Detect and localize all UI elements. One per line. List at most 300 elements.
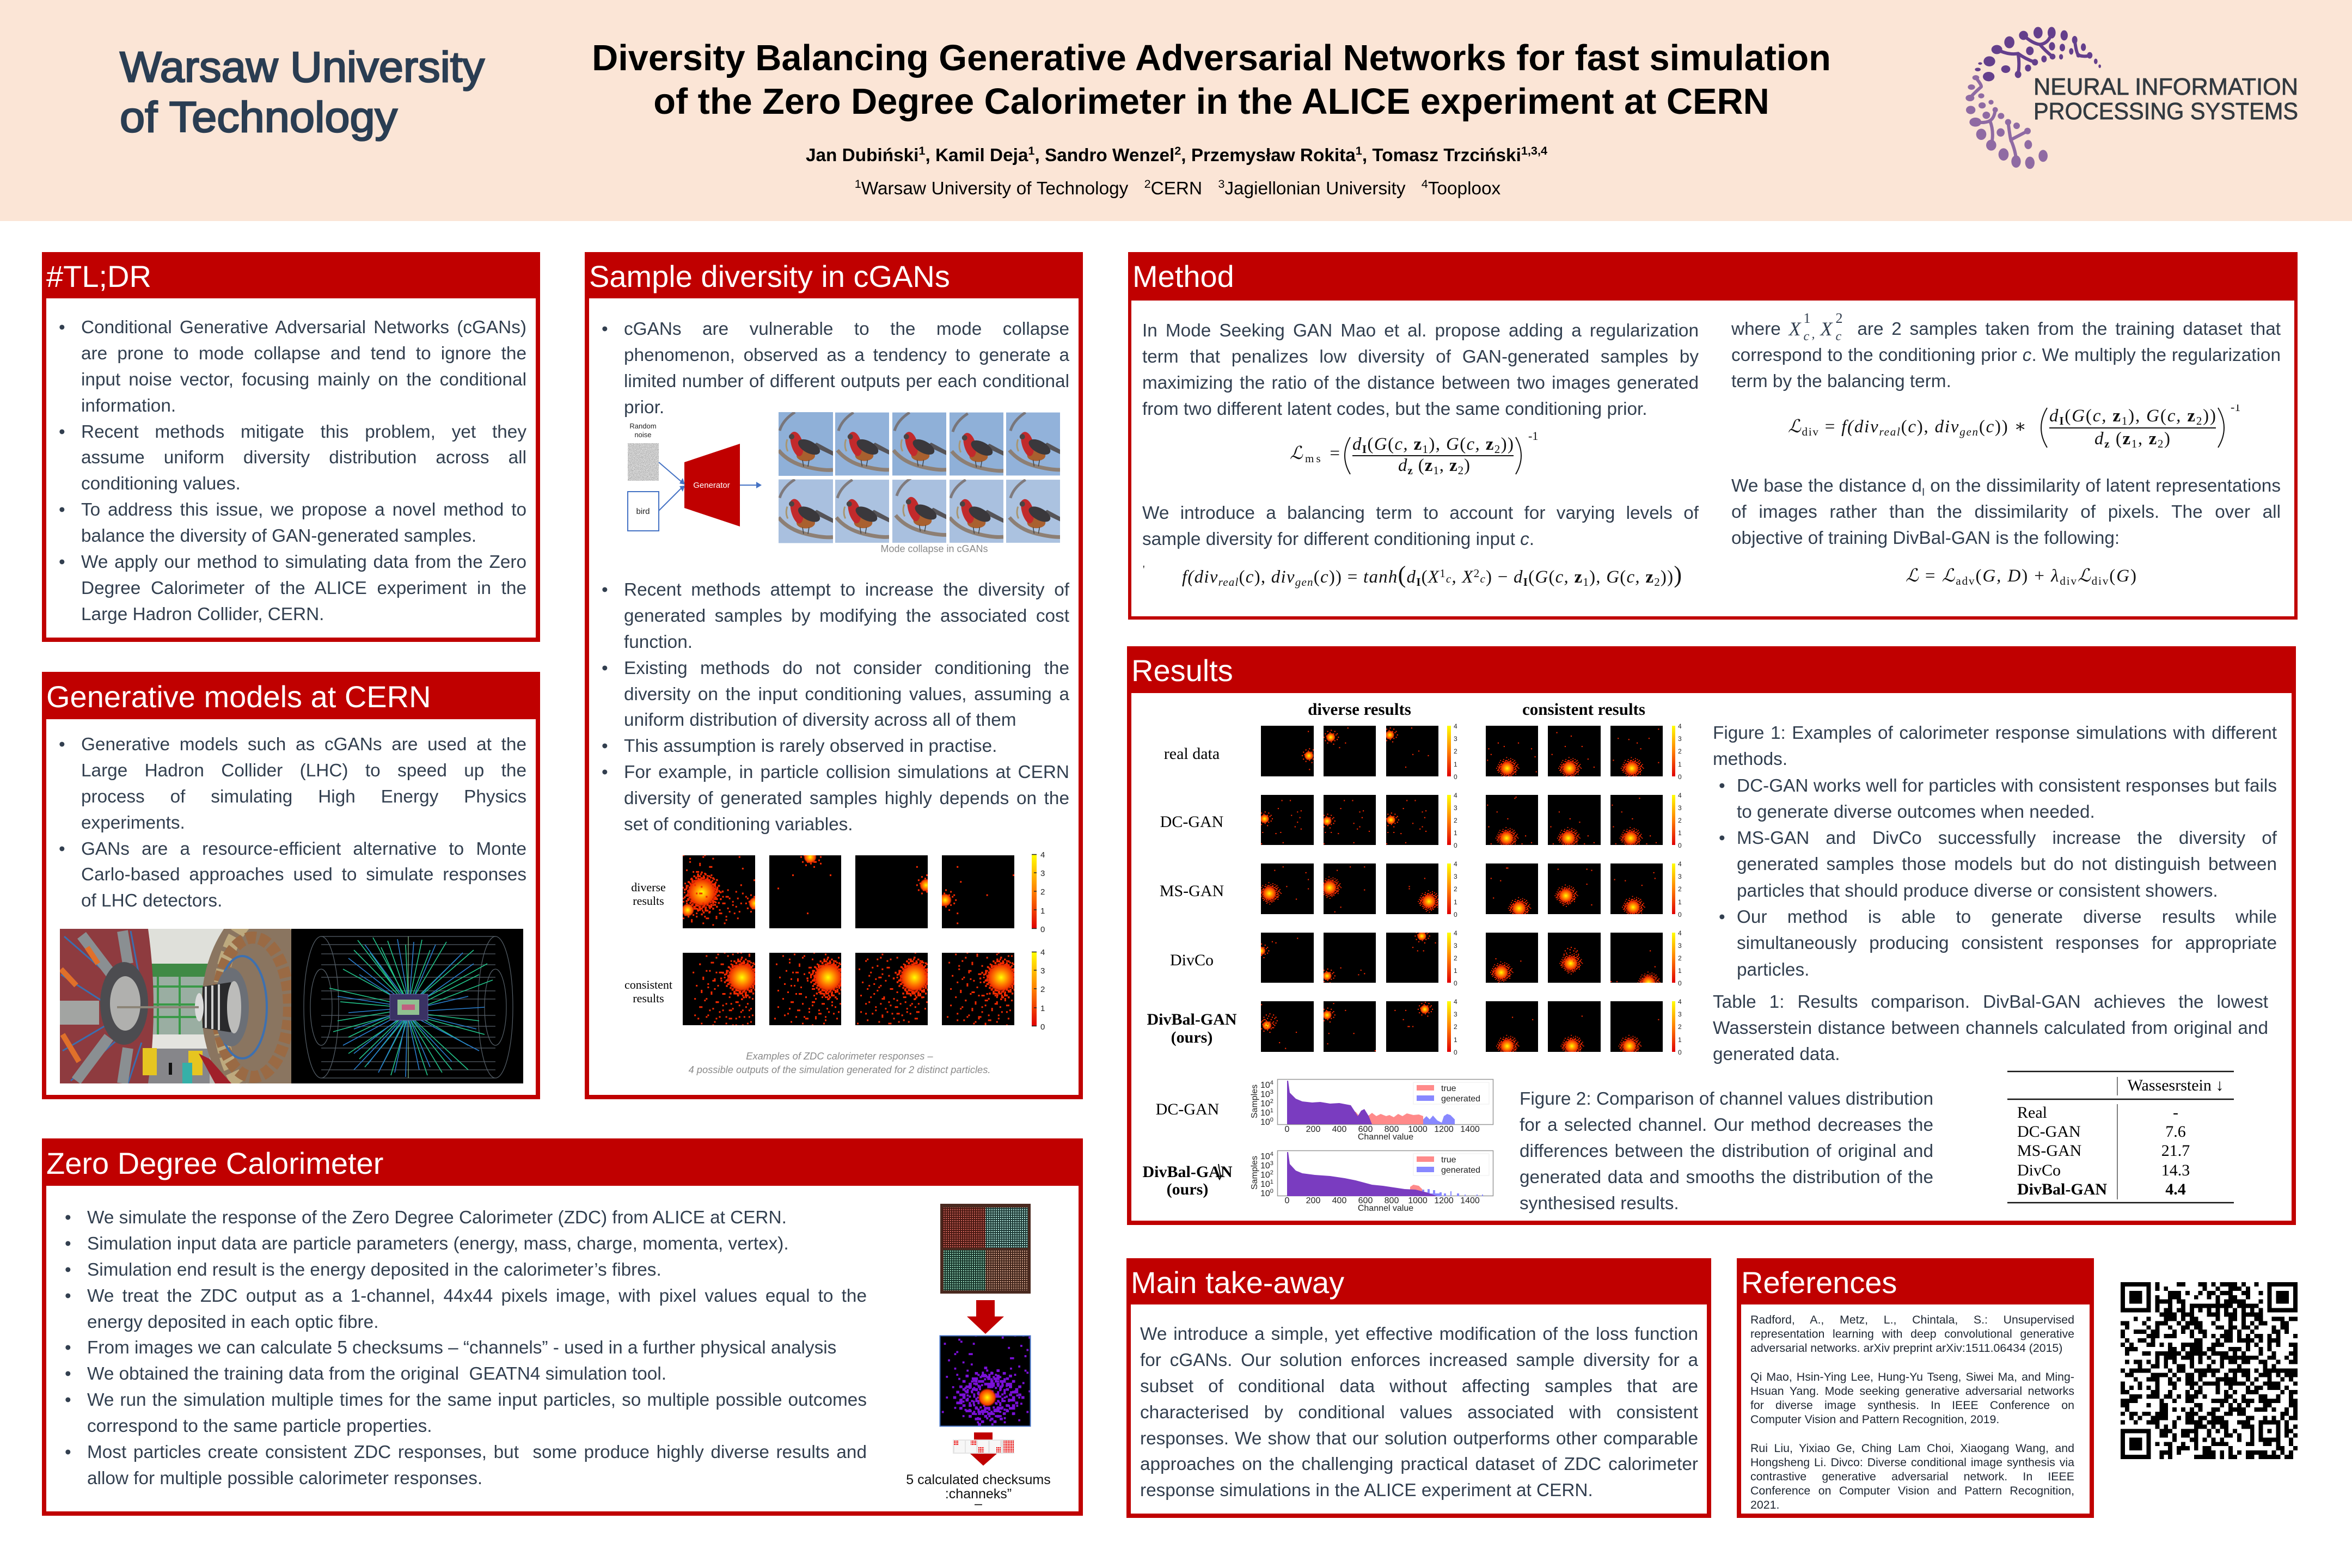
- text block: mode seeking GAN: In Mode Seeking GAN Mao et al. propose adding a regularization: [1142, 321, 1699, 341]
- text block: samples and conditioning prior: c: [1836, 329, 1841, 344]
- colorbars: 1: [1454, 761, 1457, 768]
- equation: mode seeking loss: ),: [1429, 434, 1445, 454]
- text block: ZDC bullets: We simulate the response of the Zero Degree Calorimeter (ZDC) from ALICE at CERN.: [87, 1208, 787, 1228]
- text block: samples and conditioning prior: correspond to the conditioning prior c. We multiply the regularization: [1731, 345, 2281, 365]
- histogram: DivBal-GAN: 800: [1385, 1196, 1399, 1205]
- histogram: DC-GAN: 1400: [1460, 1125, 1480, 1134]
- equation: mode seeking loss: 2: [1458, 464, 1463, 477]
- colorbars: 2: [1454, 885, 1457, 893]
- equation: mode seeking loss: ms: [1305, 452, 1321, 465]
- histogram: DivBal-GAN: 3: [1270, 1160, 1273, 1167]
- colorbars: 2: [1678, 1023, 1682, 1031]
- figure 2: channel value histograms: DC-GAN: [1156, 1100, 1219, 1118]
- text block: diversity conditioning: Recent methods attempt to increase the diversity of: [624, 580, 1069, 600]
- table: Wasserstein comparison: 7.6: [2165, 1123, 2186, 1141]
- figure: ZDC calorimeter response examples: 0: [1040, 1022, 1045, 1032]
- text block: table 1 caption: [1713, 989, 2268, 1068]
- histogram: DivBal-GAN: 1000: [1408, 1196, 1428, 1205]
- histogram: DC-GAN: Samples: [1250, 1085, 1259, 1118]
- equation: diversity loss: (: [2065, 406, 2071, 426]
- equation: mode seeking loss: ,: [1440, 456, 1449, 475]
- histogram: DC-GAN: Channel value: [1358, 1132, 1413, 1142]
- equation: balancing function: ): [1674, 561, 1682, 588]
- equation: diversity loss: ),: [2128, 406, 2145, 426]
- histogram: DivBal-GAN: Samples: [1250, 1156, 1259, 1190]
- table: Wasserstein comparison: Wassesrstein ↓: [2128, 1076, 2224, 1094]
- colorbars: 4: [1454, 722, 1457, 730]
- text block: ZDC bullets: We treat the ZDC output as a 1-channel, 44x44 pixels image, with pixel values equal to the: [87, 1286, 867, 1306]
- text block: mode seeking GAN: from two different latent codes, but the same conditioning prior.: [1142, 399, 1647, 419]
- histogram: DivBal-GAN: 1400: [1460, 1196, 1480, 1205]
- text block: samples and conditioning prior: X: [1789, 318, 1801, 340]
- text block: samples and conditioning prior: where are 2 samples taken from the training dataset that: [1731, 319, 2281, 339]
- logo: Neural Information Processing Systems: [1965, 27, 2298, 169]
- histogram: DivBal-GAN: 0: [1270, 1188, 1273, 1195]
- text block: TL;DR bullets: [59, 317, 526, 624]
- text block: TL;DR bullets: Large Hadron Collider, CERN.: [81, 604, 324, 624]
- equation: total objective: div: [2092, 574, 2109, 587]
- equation: balancing function: I: [1416, 575, 1420, 589]
- histogram: DivBal-GAN: 200: [1306, 1196, 1320, 1205]
- equation: diversity loss: d: [2049, 406, 2058, 426]
- equation: diversity loss: div: [1802, 425, 1818, 438]
- panel: Results: [1127, 646, 2296, 1225]
- equation: mode seeking loss: (: [1413, 456, 1424, 475]
- histogram: DC-GAN: 10: [1260, 1090, 1270, 1099]
- equation: total objective: G, D) + λ: [1982, 566, 2059, 586]
- histogram: DC-GAN: generated: [1441, 1094, 1480, 1104]
- colorbars: 3: [1678, 735, 1682, 743]
- histogram: DC-GAN: 4: [1270, 1080, 1273, 1086]
- text block: TL;DR bullets: conditioning values.: [81, 474, 241, 494]
- row: MS-GAN: [1258, 863, 1663, 919]
- authors: Jan Dubiński1, Kamil Deja1, Sandro Wenzel2, Przemysław Rokita1, Tomasz Trzciński1,3,4: [806, 144, 1547, 166]
- text block: generative models bullets: Generative models such as cGANs are used at the: [81, 734, 526, 755]
- text block: generative models bullets: [59, 734, 526, 911]
- text block: generative models bullets: GANs are a resource-efficient alternative to Monte: [81, 839, 526, 859]
- heading: Zero Degree Calorimeter: [42, 1138, 1083, 1186]
- row: DC-GAN: [1257, 795, 1663, 849]
- colorbars: 2: [1678, 885, 1682, 893]
- colorbars: 3: [1454, 804, 1457, 812]
- figure: ZDC calorimeter response examples: 2: [1040, 887, 1045, 897]
- colorbars: 1: [1454, 967, 1457, 975]
- colorbars: 0: [1678, 979, 1682, 987]
- text block: table 1 caption: generated data.: [1713, 1044, 1840, 1064]
- colorbars: 3: [1454, 873, 1457, 880]
- colorbars: 4: [1454, 792, 1457, 799]
- equation: mode seeking loss: =: [1323, 444, 1340, 463]
- figure 1: heatmap grid: (ours): [1171, 1028, 1212, 1046]
- text block: figure 1 discussion: Figure 1: Examples of calorimeter response simulations with different: [1713, 723, 2277, 743]
- equation: balancing function: ),: [1589, 567, 1606, 587]
- text block: balancing term: sample diversity for different conditioning input c.: [1142, 529, 1534, 549]
- text block: TL;DR bullets: Recent methods mitigate this problem, yet they: [81, 422, 526, 442]
- figure 1: heatmap grid: [1147, 700, 1682, 1056]
- colorbars: 0: [1454, 773, 1457, 781]
- text block: figure 1 discussion: •: [1719, 776, 1725, 796]
- equation: diversity loss: 1: [2122, 414, 2127, 427]
- diagram: detector to image to channels: :channeks”: [945, 1486, 1012, 1502]
- equation: mode seeking loss: (: [1367, 434, 1373, 454]
- histogram: DC-GAN: 600: [1358, 1125, 1373, 1134]
- histogram: DC-GAN: 0: [1270, 1117, 1273, 1123]
- colorbars: 1: [1454, 829, 1457, 837]
- title: Diversity Balancing Generative Adversarial Networks for fast simulation: [592, 38, 1831, 78]
- equation: balancing function: (: [1422, 567, 1428, 587]
- text block: distance on latent representations: We base the distance dI on the dissimilarity of latent representations: [1731, 476, 2281, 499]
- colorbars: 0: [1678, 911, 1682, 918]
- text block: TL;DR bullets: balance the diversity of GAN-generated samples.: [81, 526, 476, 546]
- text block: figure 1 discussion: particles.: [1737, 960, 1809, 980]
- logo: Warsaw University of Technology: [119, 42, 486, 142]
- text block: balancing term: We introduce a balancing term to account for varying levels of: [1142, 503, 1699, 523]
- equation: balancing function: G(c, z: [1535, 567, 1582, 587]
- figure: ZDC calorimeter response examples: 1: [1040, 1004, 1045, 1013]
- colorbars: 1: [1454, 898, 1457, 906]
- text block: samples and conditioning prior: 2: [1836, 310, 1843, 326]
- colorbars: 2: [1678, 817, 1682, 824]
- colorbars: 3: [1678, 804, 1682, 812]
- equation: mode seeking loss: d: [1398, 456, 1407, 475]
- equation: diversity loss: z: [2104, 437, 2109, 450]
- text block: references: 2021.: [1750, 1498, 1779, 1511]
- histogram: DivBal-GAN: 1: [1270, 1179, 1273, 1185]
- text block: references: Hongsheng Li. Divco: Diverse conditional image synthesis via: [1750, 1456, 2074, 1469]
- text block: references: Conference on Computer Vision and Pattern Recognition,: [1750, 1484, 2074, 1497]
- text block: TL;DR bullets: assume uniform diversity distribution across all: [81, 448, 526, 468]
- heading: Generative models at CERN: [42, 672, 540, 719]
- equation: balancing function: 2: [1474, 567, 1479, 580]
- text block: diversity conditioning: set of conditioning variables.: [624, 814, 853, 835]
- heading: TL;DR: #TL;DR: [46, 259, 151, 293]
- icon: neural dots mark: [1965, 27, 2101, 169]
- text block: take-away: responses. We show that our solution outperforms other comparable: [1140, 1429, 1698, 1449]
- histogram: DC-GAN: 10: [1260, 1118, 1270, 1127]
- colorbars: 4: [1454, 998, 1457, 1006]
- row: DivBal-GAN: [1260, 1001, 1663, 1057]
- text block: diversity conditioning: diversity on the input conditioning values, assuming a: [624, 684, 1069, 705]
- text block: ZDC bullets: Simulation end result is the energy deposited in the calorimeter’s fibres.: [87, 1260, 661, 1280]
- figure 1: heatmap grid: DivCo: [1170, 951, 1214, 969]
- equation: mode seeking loss: 1: [1433, 464, 1439, 477]
- colorbars: 1: [1678, 898, 1682, 906]
- colorbars: 4: [1678, 998, 1682, 1006]
- text block: TL;DR bullets: Degree Calorimeter of the ALICE experiment in the: [81, 578, 526, 598]
- text block: references: adversarial networks. arXiv preprint arXiv:1511.06434 (2015): [1750, 1342, 2062, 1355]
- figure: ZDC calorimeter response examples: results: [633, 991, 664, 1005]
- equation: diversity loss: I: [2059, 414, 2064, 427]
- heading: References: References: [1741, 1265, 1897, 1300]
- text block: TL;DR bullets: We apply our method to simulating data from the Zero: [81, 552, 526, 572]
- text block: TL;DR bullets: information.: [81, 396, 176, 416]
- text block: references: Qi Mao, Hsin-Ying Lee, Hung-Yu Tseng, Siwei Ma, and Ming-: [1750, 1370, 2074, 1383]
- equation: balancing function: [1143, 561, 1682, 589]
- equation: total objective: (: [1975, 566, 1981, 586]
- equation: diversity loss: 2: [2196, 414, 2202, 427]
- heading: TL;DR: [42, 252, 540, 298]
- equation: diversity loss: [1788, 400, 2240, 450]
- equation: balancing function: 2: [1654, 575, 1660, 589]
- equation: mode seeking loss: )): [1501, 434, 1514, 454]
- equation: balancing function: real: [1218, 575, 1238, 589]
- figure 1: heatmap grid: consistent results: [1522, 700, 1645, 719]
- equation: balancing function: c: [1480, 572, 1486, 585]
- text block: figure 2 caption: generated data and smooths the distribution of the: [1520, 1167, 1933, 1187]
- text block: ZDC bullets: Most particles create consistent ZDC responses, but some produce highly diverse results and: [87, 1442, 867, 1462]
- heading: Main take-away: Main take-away: [1131, 1265, 1344, 1300]
- equation: diversity loss: real: [1879, 425, 1900, 438]
- colorbars: 2: [1678, 748, 1682, 755]
- text block: figure 1 discussion: simultaneously producing consistent responses for appropriate: [1737, 933, 2277, 953]
- text block: mode collapse: phenomenon, observed as a tendency to generate a: [624, 345, 1069, 365]
- image: CMS detector photograph: [60, 929, 291, 1083]
- text block: generative models bullets: Large Hadron Collider (LHC) to speed up the: [81, 761, 526, 781]
- text block: diversity conditioning: Existing methods do not consider conditioning the: [624, 658, 1069, 678]
- equation: mode seeking loss: I: [1362, 443, 1367, 456]
- table: Wasserstein comparison: Real: [2017, 1104, 2047, 1122]
- colorbars: 0: [1454, 1049, 1457, 1056]
- equation: diversity loss: (: [1979, 417, 1985, 437]
- text block: figure 1 discussion: •: [1719, 907, 1725, 927]
- colorbars: 3: [1678, 1010, 1682, 1018]
- text block: take-away: We introduce a simple, yet effective modification of the loss function: [1140, 1324, 1698, 1344]
- text block: figure 2 caption: Figure 2: Comparison of channel values distribution: [1520, 1089, 1933, 1109]
- text block: samples and conditioning prior: ,: [1812, 327, 1815, 341]
- histogram: DC-GAN: 800: [1385, 1125, 1399, 1134]
- text block: references: Rui Liu, Yixiao Ge, Ching Lam Choi, Xiaogang Wang, and: [1750, 1442, 2074, 1455]
- figure 2: channel value histograms: (ours): [1167, 1180, 1208, 1198]
- text block: take-away: for cGANs. Our solution enforces increased sample diversity for a: [1140, 1350, 1698, 1370]
- colorbars: 0: [1454, 979, 1457, 987]
- colorbars: 4: [1678, 860, 1682, 868]
- equation: mode seeking loss: d: [1352, 434, 1361, 454]
- histogram: DC-GAN: 10: [1260, 1108, 1270, 1118]
- figure 1: heatmap grid: MS-GAN: [1160, 882, 1224, 900]
- histogram: DivBal-GAN: 10: [1260, 1180, 1270, 1189]
- histogram: DC-GAN: 200: [1306, 1125, 1320, 1134]
- figure 1: heatmap grid: real data: [1164, 745, 1220, 763]
- panel: Main take-away: [1126, 1258, 1711, 1518]
- colorbars: 4: [1678, 929, 1682, 937]
- equation: balancing function: )): [1661, 567, 1673, 587]
- title: of the Zero Degree Calorimeter in the ALICE experiment at CERN: [653, 82, 1769, 122]
- panel: References: [1737, 1258, 2094, 1518]
- colorbars: 3: [1454, 942, 1457, 950]
- diagram: mode collapse in cGANs: [627, 412, 1060, 554]
- equation: mode seeking loss: z: [1449, 456, 1457, 475]
- equation: balancing function: I: [1523, 575, 1528, 589]
- equation: balancing function: , X: [1451, 567, 1473, 587]
- colorbars: 2: [1454, 1023, 1457, 1031]
- histogram: DivBal-GAN: 10: [1260, 1152, 1270, 1161]
- colorbars: 4: [1454, 929, 1457, 937]
- equation: total objective: ℒ: [2078, 566, 2091, 586]
- equation: total objective: adv: [1956, 574, 1975, 587]
- colorbars: 2: [1454, 954, 1457, 962]
- table: Wasserstein comparison: DC-GAN: [2017, 1123, 2081, 1141]
- equation: balancing function: gen: [1295, 575, 1313, 589]
- histogram: DivBal-GAN: 10: [1260, 1161, 1270, 1171]
- histogram: DC-GAN: 10: [1260, 1081, 1270, 1090]
- text block: references: contrastive generative adversarial network. In IEEE: [1750, 1470, 2074, 1483]
- figure: ZDC calorimeter response examples: 4 possible outputs of the simulation generated for 2 distinct particles.: [689, 1064, 990, 1075]
- equation: total objective: G): [2116, 566, 2136, 586]
- diagram: mode collapse in cGANs: Mode collapse in cGANs: [880, 543, 988, 554]
- table: Wasserstein comparison: [2004, 1068, 2238, 1204]
- heading: Sample diversity in cGANs: [585, 252, 1083, 298]
- equation: diversity loss: ℒ: [1788, 417, 1801, 437]
- equation: diversity loss: z: [2149, 429, 2157, 449]
- text block: figure 1 discussion: •: [1719, 828, 1725, 848]
- equation: mode seeking loss: [1290, 429, 1538, 477]
- figure: ZDC calorimeter response examples: 4: [1040, 948, 1045, 957]
- text block: samples and conditioning prior: term by the balancing term.: [1731, 371, 1951, 391]
- text block: TL;DR bullets: To address this issue, we propose a novel method to: [81, 500, 526, 520]
- text block: diversity conditioning: generated samples by modifying the associated cost: [624, 606, 1069, 626]
- equation: mode seeking loss: z: [1407, 464, 1413, 477]
- row: real data: [1261, 726, 1663, 779]
- equation: diversity loss: c), div: [1908, 417, 1958, 437]
- figure: ZDC calorimeter response examples: [624, 850, 1045, 1075]
- diagram: detector to image to channels: [906, 1204, 1051, 1511]
- histogram: DivBal-GAN: Channel value: [1358, 1204, 1413, 1213]
- text block: distance on latent representations: objective of training DivBal-GAN is the following:: [1731, 528, 2120, 548]
- heading: Generative models at CERN: Generative models at CERN: [46, 679, 431, 714]
- colorbars: 3: [1678, 873, 1682, 880]
- text block: ZDC bullets: allow for multiple possible calorimeter responses.: [87, 1468, 482, 1489]
- text block: references: Hsuan Yang. Mode seeking generative adversarial networks: [1750, 1385, 2074, 1398]
- equation: diversity loss: G(c, z: [2146, 406, 2195, 426]
- figure: ZDC calorimeter response examples: 4: [1040, 850, 1045, 860]
- histogram: DC-GAN: [1250, 1079, 1493, 1142]
- text block: ZDC bullets: Simulation input data are particle parameters (energy, mass, charge, momenta, vertex).: [87, 1234, 789, 1254]
- text block: mode collapse: cGANs are vulnerable to the mode collapse: [624, 319, 1069, 339]
- QR code: [2121, 1282, 2298, 1459]
- equation: balancing function: f(div: [1182, 567, 1217, 587]
- text block: diversity conditioning: diversity of generated samples highly depends on the: [624, 788, 1069, 808]
- colorbars: 1: [1678, 829, 1682, 837]
- equation: balancing function: (: [1314, 567, 1320, 587]
- histogram: DivBal-GAN: 0: [1285, 1196, 1290, 1205]
- figure: ZDC calorimeter response examples: Examples of ZDC calorimeter responses –: [746, 1050, 934, 1062]
- text block: take-away: characterised by conditional values associated with consistent: [1140, 1402, 1698, 1423]
- figure 1: heatmap grid: DivBal-GAN: [1147, 1010, 1237, 1028]
- equation: diversity loss: c)) ∗: [1986, 417, 2026, 437]
- text block: samples and conditioning prior: c: [1804, 329, 1809, 344]
- text block: samples and conditioning prior: [1731, 310, 2281, 391]
- text block: figure 1 discussion: generated samples those models but do not distinguish between: [1737, 854, 2277, 874]
- heading: References: [1737, 1258, 2094, 1304]
- table: Wasserstein comparison: 4.4: [2165, 1180, 2186, 1198]
- text block: TL;DR bullets: are prone to mode collapse and tend to ignore the: [81, 344, 526, 364]
- text block: samples and conditioning prior: 1: [1804, 310, 1811, 326]
- histogram: DC-GAN: 0: [1285, 1125, 1290, 1134]
- equation: mode seeking loss: 2: [1494, 443, 1500, 456]
- text block: figure 1 discussion: Our method is able to generate diverse results while: [1737, 907, 2277, 927]
- text block: figure 1 discussion: particles that should produce diverse or consistent showers.: [1737, 881, 2218, 901]
- figure: ZDC calorimeter response examples: 3: [1040, 966, 1045, 976]
- figure: ZDC calorimeter response examples: 0: [1040, 925, 1045, 934]
- heading: Sample diversity in cGANs: Sample diversity in cGANs: [589, 259, 950, 293]
- text block: distance on latent representations: of images rather than the dissimilarity of pixels. The over all: [1731, 502, 2281, 522]
- text block: TL;DR bullets: Conditional Generative Adversarial Networks (cGANs): [81, 317, 526, 338]
- colorbars: 0: [1678, 773, 1682, 781]
- heading: Method: Method: [1132, 259, 1234, 293]
- text block: ZDC bullets: correspond to the same particle properties.: [87, 1416, 432, 1436]
- colorbars: 0: [1678, 842, 1682, 849]
- equation: mode seeking loss: -1: [1528, 429, 1538, 443]
- equation: balancing function: 1: [1583, 575, 1589, 589]
- colorbars: 0: [1454, 842, 1457, 849]
- colorbars: 3: [1454, 735, 1457, 743]
- equation: balancing function: c), div: [1246, 567, 1295, 587]
- text block: ZDC bullets: We obtained the training data from the original GEATN4 simulation tool.: [87, 1364, 666, 1384]
- equation: balancing function: (: [1528, 567, 1534, 587]
- equation: total objective: (: [2109, 566, 2115, 586]
- equation: total objective: ℒ = ℒ: [1906, 566, 1955, 586]
- diagram: mode collapse in cGANs: Random: [629, 422, 657, 430]
- equation: diversity loss: (: [1901, 417, 1907, 437]
- histogram: DC-GAN: 3: [1270, 1089, 1273, 1095]
- figure: ZDC calorimeter response examples: 3: [1040, 869, 1045, 878]
- table: Wasserstein comparison: DivBal-GAN: [2017, 1180, 2107, 1198]
- text block: figure 1 discussion: to generate diverse outcomes when needed.: [1737, 802, 2095, 822]
- colorbars: 2: [1678, 954, 1682, 962]
- text block: ZDC bullets: energy deposited in each optic fibre.: [87, 1312, 378, 1332]
- equation: balancing function: c: [1446, 572, 1451, 585]
- text block: take-away: subset of conditional data without affecting samples that are: [1140, 1376, 1698, 1396]
- equation: diversity loss: )): [2203, 406, 2216, 426]
- panel: Method: [1128, 252, 2298, 620]
- text block: take-away: approaches on the challenging practical dataset of ZDC calorimeter: [1140, 1454, 1698, 1474]
- histogram: DC-GAN: 1: [1270, 1107, 1273, 1114]
- equations: [1143, 405, 2240, 589]
- equation: total objective: div: [2060, 574, 2077, 587]
- text block: mode collapse: limited number of different outputs per each conditional: [624, 371, 1069, 391]
- equation: balancing function: c)) = tanh(d: [1320, 561, 1416, 588]
- diagram: detector to image to channels: 5 calculated checksums: [906, 1472, 1051, 1487]
- colorbars: 1: [1678, 1036, 1682, 1044]
- histogram: DivBal-GAN: [1250, 1151, 1493, 1213]
- panel: Sample diversity in cGANs: [585, 252, 1083, 1099]
- histogram: DC-GAN: true: [1441, 1084, 1456, 1093]
- text block: references: for diverse image synthesis. In IEEE Conference on: [1750, 1399, 2074, 1412]
- equation: total objective: [1906, 566, 2136, 587]
- histogram: DivBal-GAN: 10: [1260, 1189, 1270, 1198]
- logo: Warsaw University of Technology: Warsaw University: [120, 42, 485, 91]
- text block: mode seeking GAN: term that penalizes low diversity of GAN-generated samples by: [1142, 347, 1699, 367]
- table: Wasserstein comparison: 21.7: [2161, 1142, 2190, 1160]
- diagram: mode collapse in cGANs: noise: [634, 431, 652, 439]
- figure 1: heatmap grid: DC-GAN: [1160, 813, 1223, 831]
- text block: take-away: response simulations in the ALICE experiment at CERN.: [1140, 1480, 1593, 1500]
- row: DivCo: [1254, 929, 1663, 994]
- equation: diversity loss: 1: [2132, 437, 2137, 450]
- figure: ZDC calorimeter response examples: diverse: [631, 880, 666, 894]
- equation: diversity loss: ,: [2138, 429, 2148, 449]
- colorbars: [1447, 722, 1682, 1056]
- histogram: DC-GAN: 1200: [1434, 1125, 1454, 1134]
- equation: mode seeking loss: z: [1425, 456, 1432, 475]
- header banner: [0, 0, 2352, 221]
- histogram: DivBal-GAN: generated: [1441, 1166, 1480, 1175]
- figure: ZDC calorimeter response examples: consistent: [624, 978, 672, 991]
- text block: diversity conditioning: [602, 580, 1069, 835]
- equation: mode seeking loss: ): [1464, 456, 1470, 475]
- text block: references: [1750, 1313, 2074, 1512]
- text block: figure 1 discussion: [1713, 723, 2277, 980]
